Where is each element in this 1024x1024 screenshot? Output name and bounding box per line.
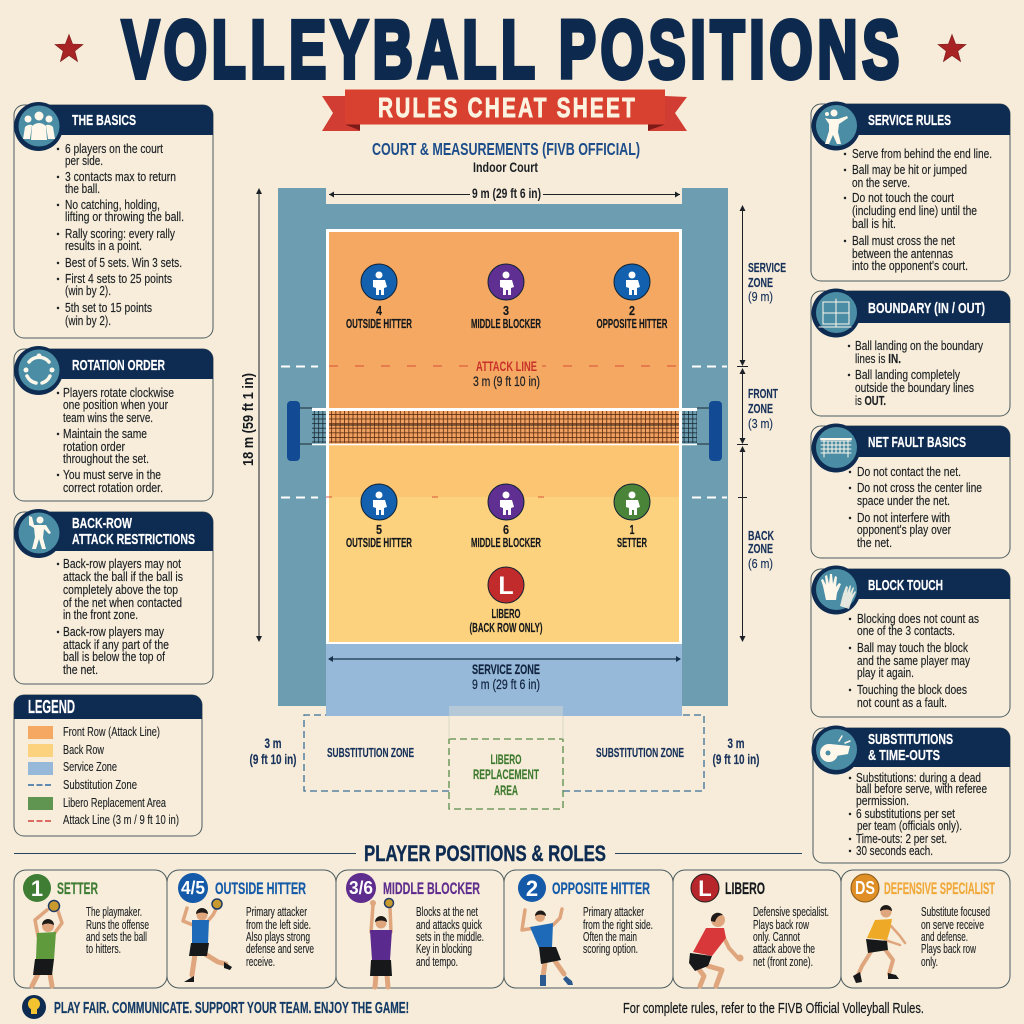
panel: substitutions and time-outs: ball before serve, with referee	[856, 781, 987, 796]
card: middle blocker: 3/6	[349, 878, 373, 898]
panel: rotation order: Players rotate clockwise	[63, 385, 174, 400]
panel: substitutions and time-outs	[812, 726, 1010, 863]
player 1 setter	[614, 484, 650, 550]
net	[287, 401, 722, 461]
panel: back-row attack restrictions: Back-row players may not	[63, 556, 181, 571]
panel: net fault basics: Do not contact the net.	[857, 464, 961, 479]
card: outside hitter: receive.	[246, 955, 275, 969]
panel: rotation order: throughout the set.	[63, 451, 149, 466]
icon: left star	[55, 34, 83, 62]
panel: rotation order: ROTATION ORDER	[72, 357, 165, 374]
back zone side label: (6 m)	[748, 556, 773, 571]
panel: rotation order: one position when your	[63, 397, 169, 412]
libero replacement area: REPLACEMENT	[473, 766, 539, 782]
card: libero: L	[698, 876, 712, 901]
player 2 opposite hitter: OPPOSITE HITTER	[596, 317, 668, 331]
service zone measure: SERVICE ZONE	[472, 662, 540, 677]
back row upper	[329, 410, 679, 497]
panel: back-row attack restrictions: Back-row players may	[63, 624, 164, 639]
icon: team	[14, 102, 63, 151]
libero marker: (BACK ROW ONLY)	[470, 621, 542, 635]
panel: legend: LEGEND	[28, 697, 75, 717]
panel: substitutions and time-outs: & TIME-OUTS	[868, 747, 940, 764]
panel: the basics: 5th set to 15 points	[65, 300, 152, 315]
left 3 m measure: 3 m	[264, 735, 282, 751]
card: setter: Runs the offense	[86, 918, 149, 932]
panel: block touch: play it again.	[857, 665, 914, 680]
panel: legend: Attack Line (3 m / 9 ft 10 in)	[63, 813, 179, 827]
figure: outside hitter	[183, 899, 232, 982]
card: outside hitter: Also plays strong	[246, 930, 310, 944]
card: setter: The playmaker.	[86, 905, 142, 919]
panel: service rules: Do not touch the court	[852, 190, 954, 205]
panel: boundary in or out: lines is IN.	[855, 351, 901, 366]
player 1 setter: 1	[630, 522, 634, 537]
panel: the basics	[14, 102, 213, 338]
panel: net fault basics	[811, 424, 1010, 558]
panel: block touch: one of the 3 contacts.	[857, 623, 955, 638]
figure: defensive specialist	[853, 905, 905, 983]
panel: the basics: lifting or throwing the ball.	[65, 209, 184, 224]
panel: boundary in or out: Ball landing on the boundary	[855, 338, 983, 353]
service zone side label: ZONE	[748, 275, 773, 290]
card: opposite hitter: scoring option.	[583, 942, 638, 956]
front zone side label	[748, 386, 778, 431]
panel: back-row attack restrictions: completely above the top	[63, 582, 178, 597]
card: defensive specialist: only.	[921, 955, 938, 969]
card: setter: 1	[31, 876, 43, 901]
left 3 m measure: (9 ft 10 in)	[250, 751, 296, 767]
card: outside hitter: OUTSIDE HITTER	[215, 879, 306, 898]
card: middle blocker: MIDDLE BLOCKER	[383, 879, 480, 898]
card: libero: net (front zone).	[753, 955, 813, 969]
icon: rotation arrows	[14, 346, 63, 395]
panel: rotation order	[14, 346, 213, 501]
panel: block touch: BLOCK TOUCH	[868, 577, 943, 594]
panel: legend: Libero Replacement Area	[63, 796, 166, 810]
icon: hands	[812, 566, 860, 614]
card: opposite hitter: from the right side.	[583, 918, 653, 932]
banner: rules cheat sheet: RULES CHEAT SHEET	[378, 92, 637, 123]
card: middle blocker: and attacks quick	[416, 918, 483, 932]
front row	[329, 232, 679, 410]
card: opposite hitter: Often the main	[583, 930, 637, 944]
panel: back-row attack restrictions: ball is below the top of	[63, 649, 165, 664]
panel: back-row attack restrictions: BACK-ROW	[72, 515, 133, 532]
panel: service rules: into the opponent's court.	[852, 258, 968, 273]
panel: boundary in or out: BOUNDARY (IN / OUT)	[868, 300, 985, 317]
panel: the basics: results in a point.	[65, 238, 142, 253]
service zone side label	[748, 260, 786, 304]
player 6 middle blocker	[471, 484, 541, 550]
card: outside hitter: defense and serve	[246, 942, 314, 956]
panel: rotation order: correct rotation order.	[63, 480, 163, 495]
court white border	[326, 229, 682, 644]
player 2 opposite hitter	[596, 264, 668, 331]
panel: rotation order: rotation order	[63, 439, 126, 454]
heading: court and measurements	[372, 139, 640, 175]
panel: service rules: ball is hit.	[852, 216, 896, 231]
icon: light bulb	[22, 995, 46, 1019]
panel: block touch: not count as a fault.	[857, 695, 947, 710]
right 3 m measure: (9 ft 10 in)	[712, 751, 760, 767]
panel: back-row attack restrictions: of the net when contacted	[63, 595, 182, 610]
attack line label: ATTACK LINE	[476, 358, 537, 374]
card: opposite hitter	[504, 870, 673, 988]
panel: the basics: No catching, holding,	[65, 197, 160, 212]
icon: court boundary	[812, 288, 860, 338]
panel: substitutions and time-outs: permission.	[856, 793, 909, 808]
panel: the basics: First 4 sets to 25 points	[65, 271, 172, 286]
panel: the basics: Best of 5 sets. Win 3 sets.	[65, 255, 182, 270]
substitution zone left	[304, 715, 449, 791]
right 3 m measure: 3 m	[728, 735, 744, 751]
player 6 middle blocker: 6	[503, 522, 509, 537]
card: outside hitter	[167, 870, 336, 988]
card: setter: and sets the ball	[86, 930, 147, 944]
free zone	[278, 188, 728, 706]
panel: back-row attack restrictions	[14, 509, 213, 684]
panel: the basics: THE BASICS	[72, 112, 136, 129]
panel: rotation order: You must serve in the	[63, 467, 161, 482]
card: defensive specialist: on serve receive	[921, 918, 984, 932]
libero replacement area: AREA	[494, 782, 518, 798]
card: outside hitter: from the left side.	[246, 918, 311, 932]
figure: middle blocker	[370, 898, 394, 987]
panel: block touch: and the same player may	[857, 653, 970, 668]
panel: rotation order: Maintain the same	[63, 426, 147, 441]
icon: right star	[938, 34, 966, 62]
service zone	[326, 640, 682, 716]
panel: legend	[14, 695, 202, 836]
card: libero: only. Cannot	[753, 930, 800, 944]
panel: the basics: Rally scoring: every rally	[65, 226, 175, 241]
panel: block touch	[811, 566, 1010, 717]
service zone measure	[328, 656, 681, 692]
player 3 middle blocker: 3	[503, 303, 509, 318]
card: defensive specialist: Plays back row	[921, 942, 977, 956]
panel: substitutions and time-outs: 30 seconds each.	[856, 843, 933, 858]
player 3 middle blocker: MIDDLE BLOCKER	[471, 317, 541, 331]
panel: service rules: (including end line) until the	[852, 203, 977, 218]
panel: net fault basics: opponent's play over	[857, 522, 952, 537]
heading: court and measurements: Indoor Court	[473, 160, 538, 175]
attack line label	[470, 358, 542, 389]
card: defensive specialist: Substitute focused	[921, 905, 990, 919]
panel: service rules	[811, 102, 1010, 281]
player 6 middle blocker: MIDDLE BLOCKER	[471, 536, 541, 550]
icon: server	[812, 102, 860, 150]
heading: player positions and roles: PLAYER POSITIONS & ROLES	[364, 841, 606, 866]
front zone side label: (3 m)	[748, 416, 773, 431]
panel: the basics: (win by 2).	[65, 313, 111, 328]
panel: substitutions and time-outs: Time-outs: 2 per set.	[856, 831, 947, 846]
panel: boundary in or out: is OUT.	[855, 393, 886, 408]
substitution zone left: SUBSTITUTION ZONE	[327, 745, 414, 760]
libero marker: LIBERO	[492, 607, 521, 621]
panel: the basics: 3 contacts max to return	[65, 169, 176, 184]
panel: legend: Back Row	[63, 743, 105, 757]
panel: boundary in or out: outside the boundary lines	[855, 380, 974, 395]
panel: service rules: SERVICE RULES	[868, 112, 951, 129]
front zone side label: ZONE	[748, 401, 773, 416]
panel: boundary in or out	[811, 288, 1010, 416]
back row lower	[329, 497, 679, 642]
panel: substitutions and time-outs: 6 substitutions per set	[856, 806, 955, 821]
service zone side label: SERVICE	[748, 260, 786, 275]
panel: the basics: the ball.	[65, 181, 100, 196]
card: outside hitter: Primary attacker	[246, 905, 307, 919]
attack line top	[281, 365, 727, 368]
libero marker: L	[498, 572, 514, 600]
panel: legend: Service Zone	[63, 760, 117, 774]
footer message: PLAY FAIR. COMMUNICATE. SUPPORT YOUR TEAM. ENJOY THE GAME!	[54, 1000, 409, 1017]
libero marker	[470, 567, 542, 635]
card: defensive specialist	[841, 870, 1010, 988]
legend swatches	[28, 726, 53, 821]
figure: setter	[32, 900, 62, 986]
back zone side label	[748, 528, 774, 571]
card: libero: LIBERO	[725, 879, 765, 898]
panel: block touch: Touching the block does	[857, 682, 967, 697]
card: setter: to hitters.	[86, 942, 121, 956]
icon: whistle	[812, 726, 860, 774]
card: middle blocker	[336, 870, 504, 988]
heading: court and measurements: COURT & MEASUREMENTS (FIVB OFFICIAL)	[372, 139, 640, 159]
service zone side label: (9 m)	[748, 289, 773, 304]
panel: rotation order: team wins the serve.	[63, 410, 153, 425]
figure: opposite hitter	[522, 909, 573, 986]
panel: net fault basics: Do not interfere with	[857, 510, 950, 525]
card: middle blocker: Blocks at the net	[416, 905, 478, 919]
panel: block touch: Ball may touch the block	[857, 640, 968, 655]
player 1 setter: SETTER	[617, 536, 647, 550]
panel: substitutions and time-outs: Substitutions: during a dead	[856, 770, 981, 785]
panel: the basics: 6 players on the court	[65, 141, 163, 156]
length measure: 18 m (59 ft 1 in)	[240, 373, 257, 466]
panel: service rules: Ball must cross the net	[852, 233, 955, 248]
panel: net fault basics: Do not cross the center line	[857, 480, 982, 495]
card: libero: Plays back row	[753, 918, 810, 932]
substitution zone right	[563, 715, 704, 791]
length measure	[240, 188, 262, 642]
panel: back-row attack restrictions: attack the ball if the ball is	[63, 569, 183, 584]
panel: the basics: (win by 2).	[65, 283, 111, 298]
card: middle blocker: Key in blocking	[416, 942, 472, 956]
card: defensive specialist: DS	[855, 878, 875, 898]
card: opposite hitter: OPPOSITE HITTER	[552, 879, 650, 898]
card: outside hitter: 4/5	[181, 878, 205, 898]
top width measure	[329, 186, 680, 201]
attack line bottom	[281, 496, 727, 498]
card: libero	[673, 870, 841, 988]
panel: block touch: Blocking does not count as	[857, 611, 979, 626]
icon: attacking player	[14, 509, 63, 558]
panel: substitutions and time-outs: SUBSTITUTIONS	[868, 731, 953, 748]
player 4 outside hitter: 4	[376, 303, 383, 318]
panel: back-row attack restrictions: in the front zone.	[63, 607, 138, 622]
banner: rules cheat sheet	[322, 90, 687, 131]
panel: boundary in or out: Ball landing completely	[855, 367, 960, 382]
libero replacement area	[449, 716, 563, 809]
back zone side label: ZONE	[748, 541, 773, 556]
attack line label: 3 m (9 ft 10 in)	[473, 374, 540, 389]
panel: back-row attack restrictions: the net.	[63, 662, 98, 677]
service zone measure: 9 m (29 ft 6 in)	[472, 677, 540, 692]
player 4 outside hitter	[346, 264, 412, 331]
substitution zone right: SUBSTITUTION ZONE	[596, 745, 684, 760]
panel: service rules: between the antennas	[852, 246, 953, 261]
card: opposite hitter: 2	[526, 876, 538, 901]
player 3 middle blocker	[471, 264, 541, 331]
panel: net fault basics: space under the net.	[857, 493, 950, 508]
panel: legend: Substitution Zone	[63, 778, 137, 792]
top width measure: 9 m (29 ft 6 in)	[472, 186, 541, 201]
panel: legend: Front Row (Attack Line)	[63, 725, 160, 739]
panel: back-row attack restrictions: attack if any part of the	[63, 637, 169, 652]
panel: net fault basics: NET FAULT BASICS	[868, 434, 966, 451]
card: libero: Defensive specialist.	[753, 905, 829, 919]
card: setter	[14, 870, 167, 988]
player 4 outside hitter: OUTSIDE HITTER	[346, 317, 412, 331]
icon: net	[812, 424, 860, 472]
player 5 outside hitter: OUTSIDE HITTER	[346, 536, 412, 550]
player 2 opposite hitter: 2	[629, 303, 635, 318]
card: middle blocker: and tempo.	[416, 955, 458, 969]
right side measures	[737, 205, 748, 642]
player 5 outside hitter: 5	[376, 522, 382, 537]
panel: substitutions and time-outs: per team (officials only).	[857, 818, 962, 833]
back zone side label: BACK	[748, 528, 774, 543]
footer reference: For complete rules, refer to the FIVB Official Volleyball Rules.	[623, 1001, 924, 1017]
card: libero: attack above the	[753, 942, 815, 956]
front zone side label: FRONT	[748, 386, 778, 401]
card: defensive specialist: and defense.	[921, 930, 968, 944]
panel: service rules: on the serve.	[852, 175, 910, 190]
panel: net fault basics: the net.	[857, 535, 892, 550]
panel: the basics: per side.	[65, 153, 103, 168]
left 3 m measure	[250, 735, 296, 767]
card: opposite hitter: Primary attacker	[583, 905, 644, 919]
figure: libero	[689, 913, 744, 986]
card: setter: SETTER	[57, 879, 98, 898]
right 3 m measure	[712, 735, 760, 767]
panel: service rules: Ball may be hit or jumped	[852, 162, 967, 177]
libero replacement area: LIBERO	[490, 751, 522, 767]
player 5 outside hitter	[346, 484, 412, 550]
court diagram	[240, 186, 786, 809]
card: middle blocker: sets in the middle.	[416, 930, 484, 944]
panel: back-row attack restrictions: ATTACK RESTRICTIONS	[72, 531, 195, 548]
